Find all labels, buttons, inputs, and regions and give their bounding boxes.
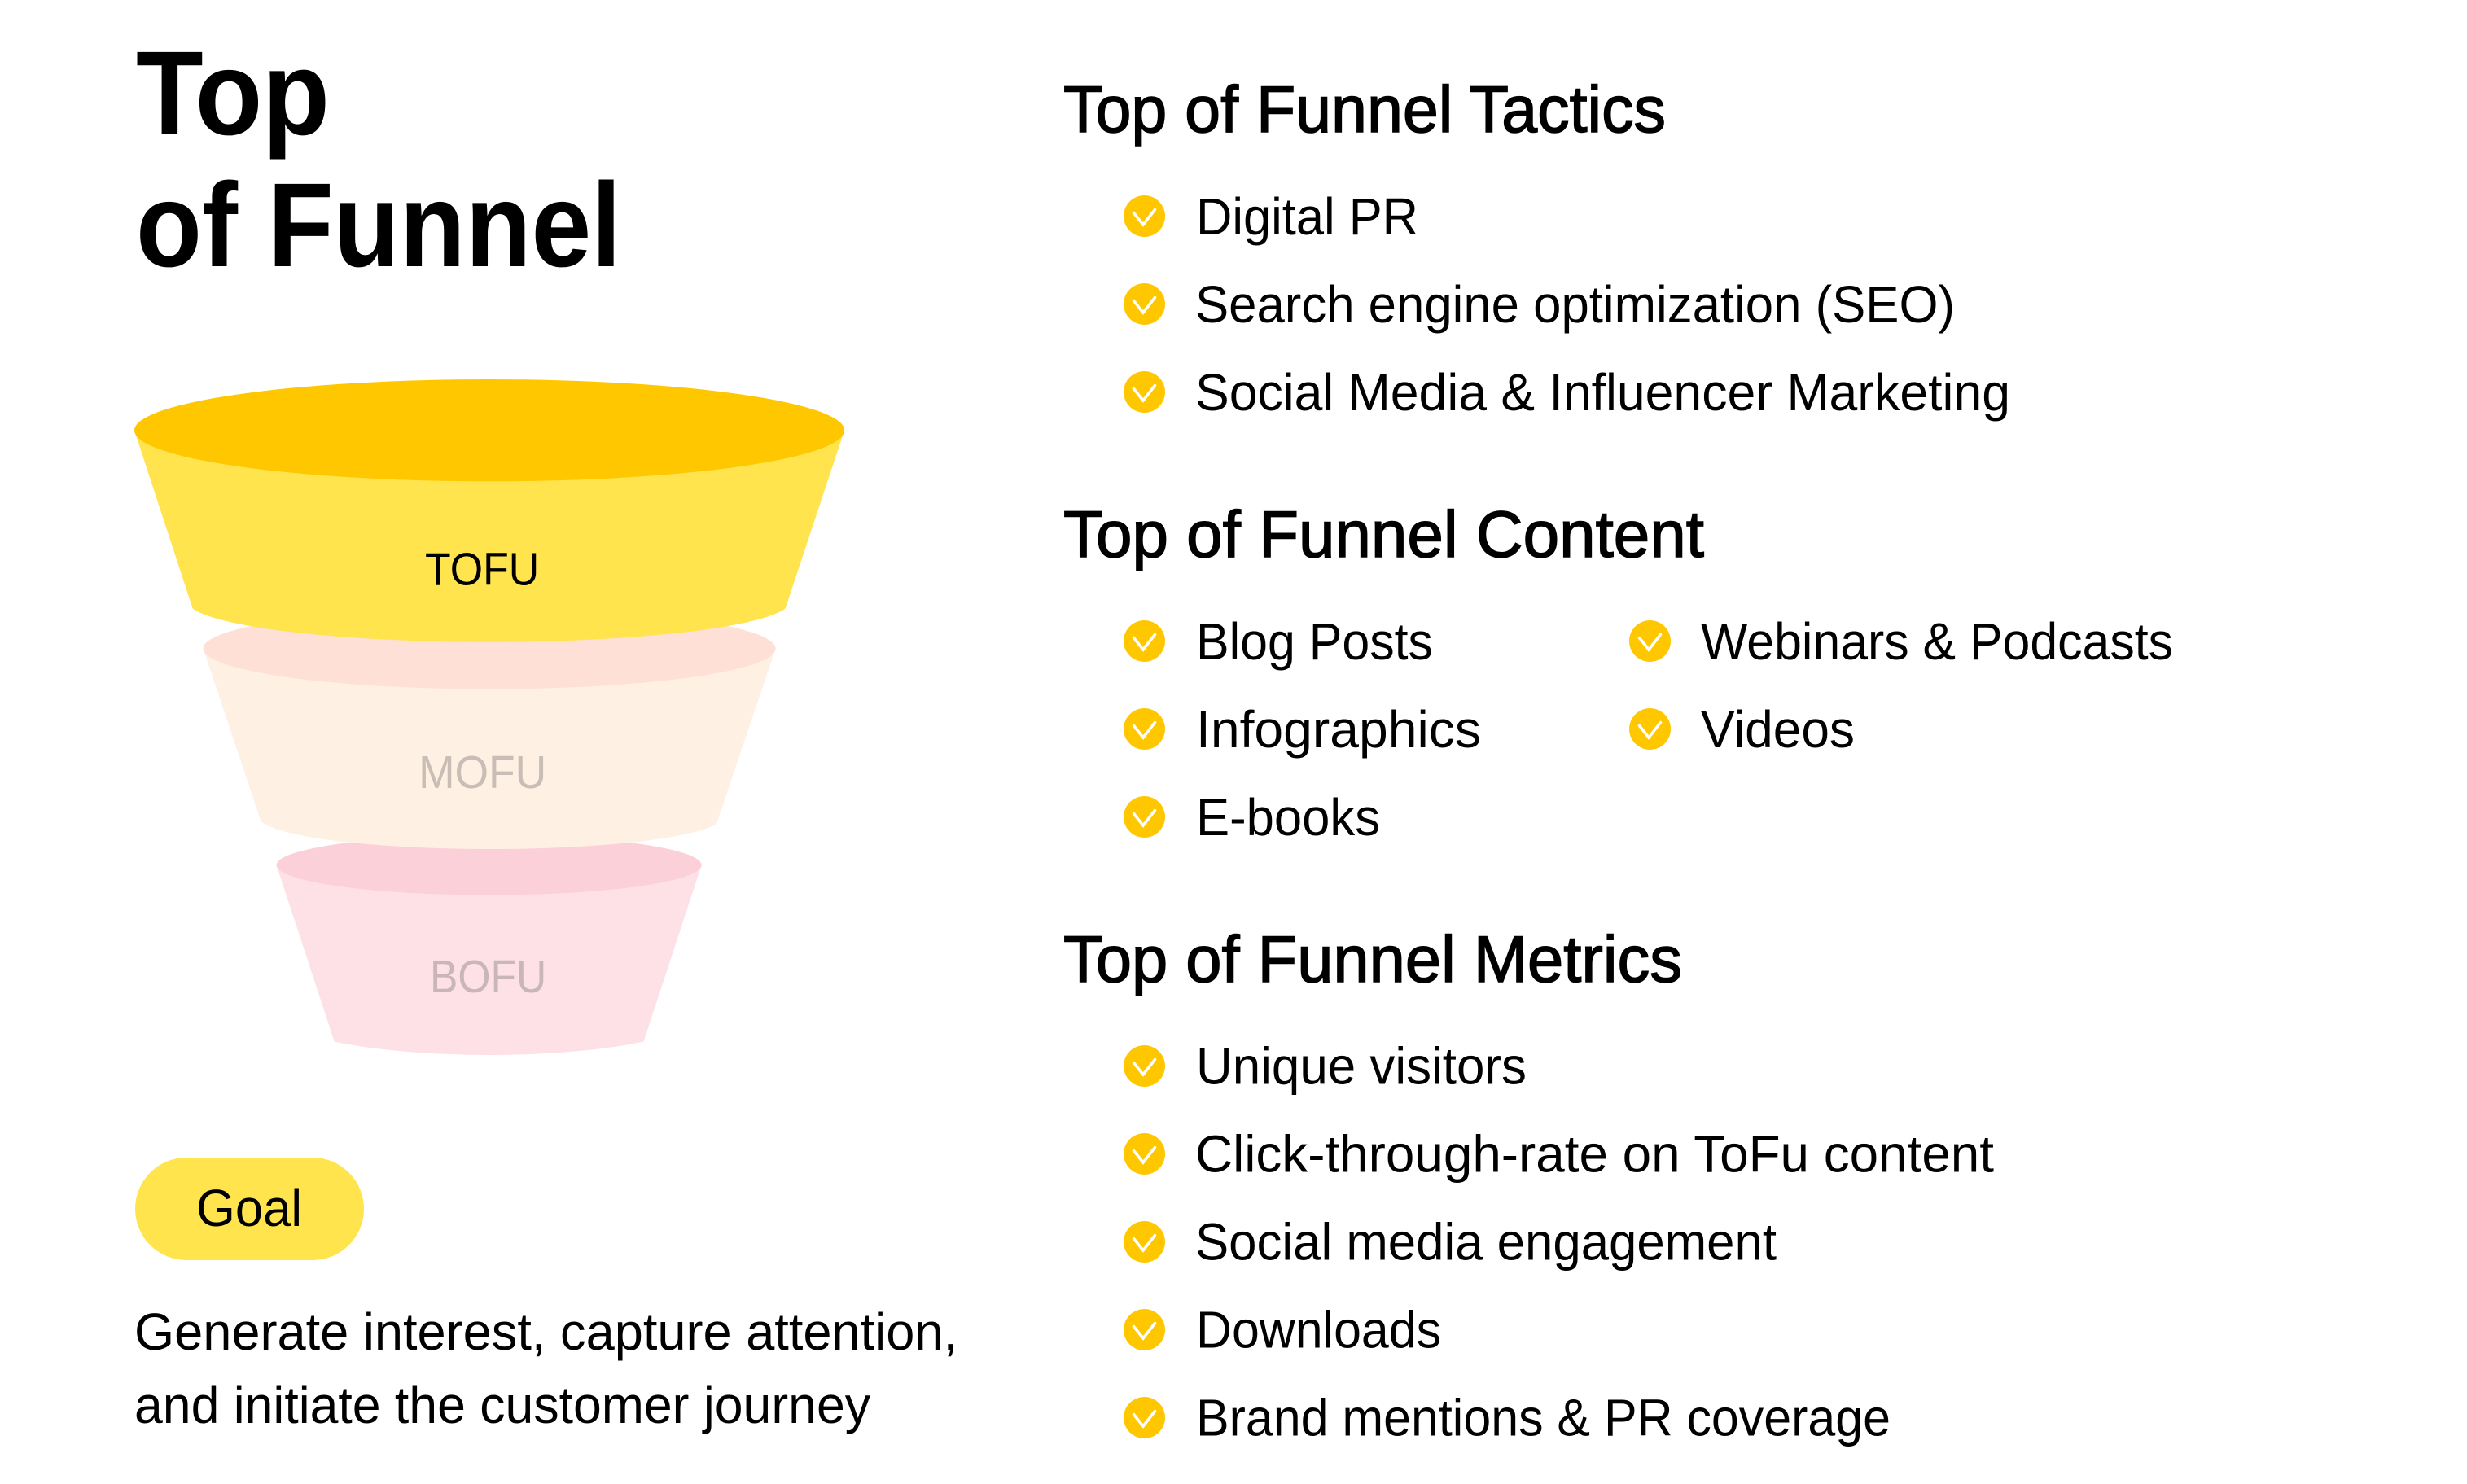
list item: E-books (1124, 788, 1380, 847)
panel: metrics (1063, 923, 1994, 1447)
funnel stage: TOFU: TOFU (425, 545, 539, 596)
list item: Social Media: Social Media & Influencer Marketing (1195, 363, 2010, 422)
funnel chart (134, 379, 844, 1055)
funnel stage: MOFU (204, 608, 776, 849)
list item: Videos: Videos (1701, 700, 1855, 759)
list item: SEO: Search engine optimization (SEO) (1195, 275, 1955, 334)
funnel stage: TOFU (134, 379, 844, 642)
list item: Unique visitors: Unique visitors (1196, 1037, 1527, 1096)
goal pill: Goal (196, 1179, 302, 1237)
title: Top (136, 27, 330, 160)
title: of Funnel (136, 159, 621, 292)
list item: E-books: E-books (1196, 788, 1380, 847)
list item: Downloads: Downloads (1196, 1301, 1441, 1359)
panel: content (1063, 498, 2173, 847)
list item: Brand mentions: Brand mentions & PR coverage (1196, 1389, 1891, 1447)
heading: tactics: Top of Funnel Tactics (1063, 73, 1666, 147)
list item: Social media engagement: Social media engagement (1195, 1213, 1777, 1272)
goal pill (135, 1158, 364, 1260)
list item: Infographics: Infographics (1196, 700, 1481, 759)
panel: tactics (1063, 73, 2010, 422)
list item: Webinars & Podcasts: Webinars & Podcasts (1701, 612, 2173, 671)
funnel stage: MOFU: MOFU (418, 747, 546, 799)
funnel stage: BOFU (277, 835, 702, 1055)
heading: metrics: Top of Funnel Metrics (1063, 923, 1682, 996)
list item: Digital PR: Digital PR (1196, 187, 1418, 246)
title (136, 27, 621, 292)
heading: content: Top of Funnel Content (1063, 498, 1704, 571)
goal description: Generate interest, capture attention, (134, 1302, 957, 1361)
goal description: and initiate the customer journey (134, 1376, 870, 1434)
list item: Blog Posts: Blog Posts (1196, 612, 1433, 671)
list item: Videos (1629, 700, 1855, 759)
list item: Click-through-rate: Click-through-rate on ToFu content (1195, 1125, 1994, 1184)
goal description (134, 1302, 957, 1434)
funnel stage: BOFU: BOFU (430, 952, 546, 1003)
